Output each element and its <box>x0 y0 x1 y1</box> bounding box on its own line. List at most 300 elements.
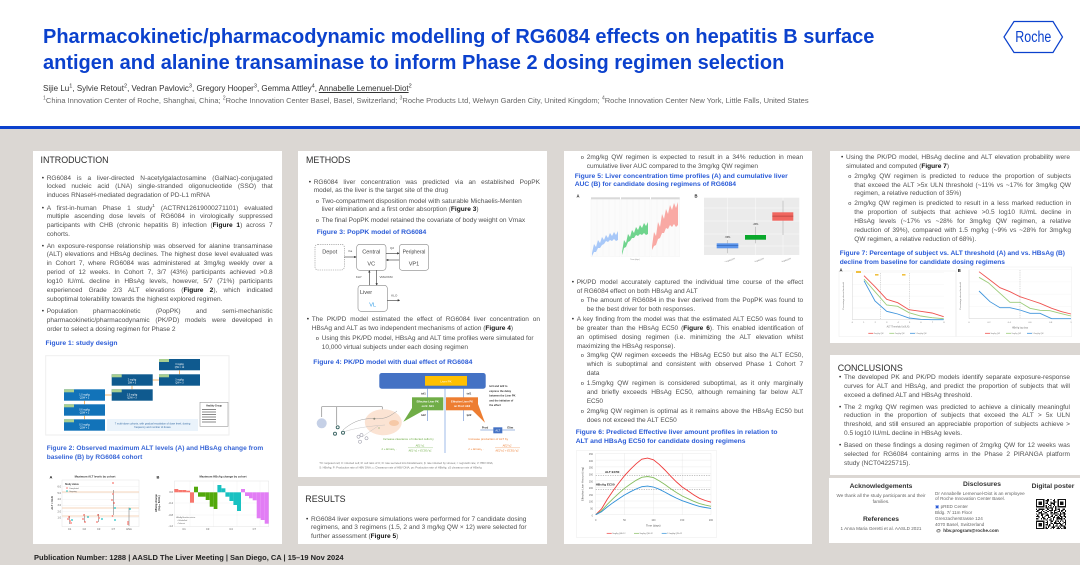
text: using PK/PD: Using the PK/PD model, HBsAg decline and ALT elevation probability were <box>846 154 1070 161</box>
footnote: TC: targeted cell; C: infected cell; R: cell ratio of C; D: rate secreted into bloodstream; β: rate infected by viruses; r: regrowth rate; V: HBV DNA; <box>319 461 493 465</box>
cohort boxes: 3 mg/kg <box>175 363 184 366</box>
text: exposure-response: suboptimal tolerability towards the highest explored regimen. <box>47 296 222 303</box>
figure 6: effective liver amount line chart <box>576 450 717 538</box>
text: conclusion 3: Based on these findings a dosing regimen of 2mg/kg QW for 12 weeks was <box>844 442 1070 449</box>
figure 6: effective liver amount line chart: 50 <box>623 519 626 522</box>
figure 6: effective liver amount line chart: Effective Liver Amount (mg) <box>580 467 584 501</box>
text: best driver <box>587 297 803 315</box>
note: and the initiation of <box>489 398 513 402</box>
heading: introduction: INTRODUCTION <box>40 155 109 165</box>
disclosures: of Roche Innovation Center Basel. <box>935 496 1005 501</box>
figure 5B: cumulative AUC box plot: -50% <box>725 236 731 239</box>
text: two-compartment model: Two-compartment disposition model with saturable Michaelis-Menten <box>322 198 522 204</box>
figure 2A: maximum ALT levels chart: 2.0 <box>58 510 62 514</box>
panel: results simulations <box>830 151 1080 343</box>
figure 7B: percentage vs HBsAg decline: 0.2 <box>987 322 991 324</box>
figure 7 title <box>840 250 1065 266</box>
figure 7A: percentage vs ALT threshold: 4 <box>897 322 899 324</box>
figure 3: PopPK compartment diagram: Ka <box>348 249 352 253</box>
figure 4: PK/PD dual-effect diagram: AE2^γ2 <box>502 444 512 448</box>
text: conclusion 2: The 2 mg/kg QW regimen was predicted to achieve a clinically meaningful <box>844 404 1070 410</box>
text: exposure-response: log10 IU/mL decline in HBsAg levels, however, 5/7 (71%) participants <box>47 278 273 285</box>
legend: 2mg/kg QW×12 <box>640 532 653 535</box>
note: tel1 and tel2 to <box>489 384 508 388</box>
legend <box>607 532 682 535</box>
cohort boxes: 0.6 mg/kg <box>79 408 90 411</box>
panel: acknowledgements, disclosures, digital poster <box>829 478 1080 543</box>
figure 2A: maximum ALT levels chart: C1 <box>68 527 72 531</box>
affiliations: 1China Innovation Center of Roche, Shanghai, China; 2Roche Innovation Center Basel, Basel, Switzerland; 3Roche Products Ltd, Welwyn Garden City, United Kingdom; 4Roche Innovation Center New York, Little Falls, United States <box>43 95 809 104</box>
figure 7B: percentage vs HBsAg decline: 0.8 <box>1049 322 1053 324</box>
text: PK/PD estimated effect: HBsAg and ALT as two independent mechanisms of action (Figure 4) <box>312 325 513 332</box>
text: exposure simulations: regimens, and 3 regimens (1.5, 2 and 3 mg/kg QW × 12) were selected for <box>311 524 527 531</box>
figure 2A: maximum ALT levels chart: 4.0 <box>58 498 62 501</box>
figure 7A: percentage vs ALT threshold: 8 <box>943 322 945 324</box>
legend box: Healthy Group <box>206 404 223 408</box>
text: models developed: Population pharmacokinetic (PopPK) and semi-mechanistic <box>47 308 273 315</box>
disclosures: 4070 Basel, Switzerland <box>935 522 984 527</box>
text: exposure-response: in Cohort 7, where RG6084 was administered at 3mg/kg weekly over a <box>47 260 273 267</box>
formulas: AE1^γ1 + EC50₁^γ1 <box>407 448 432 452</box>
figure 7 title: decline from baseline for candidate dosing regimens <box>840 259 1005 266</box>
cohort boxes: QW × 12 <box>175 366 185 369</box>
text: final PopPK: The final PopPK model retained the covariate of body weight on Vmax <box>322 217 525 224</box>
figure 6: effective liver amount line chart: 350 <box>589 467 594 470</box>
text: simulation: 10,000 virtual subjects under each dosing regimen <box>322 344 468 350</box>
text: first-in-human study: A first-in-human Phase 1 study1 (ACTRN12619000271101) evaluated <box>47 202 273 212</box>
note: 7 multi-dose cohorts, with gradual escalation of dose level, dosing <box>115 422 191 426</box>
text: RG6084 liver concentration: RG6084 liver concentration was predicted via an established PopPK <box>314 178 540 186</box>
footnote <box>319 461 493 469</box>
figure 7A: percentage vs ALT threshold: 5 <box>909 322 911 324</box>
figure 6: effective liver amount line chart: 100 <box>651 519 656 522</box>
figure 5 title <box>575 173 788 188</box>
text: conclusion 2 <box>844 404 1070 439</box>
references: 1 Anna Maria Geretti et al. AASLD 2021 <box>841 526 921 531</box>
text: exposure-response: experienced Grade 2/3 ALT elevations (Figure 2), which indicated <box>47 287 273 294</box>
text: 2 mg/kg optimal: 2mg/kg QW regimen is optimal as it remains above the HBsAg EC50 but <box>587 408 803 415</box>
references: References <box>863 516 899 523</box>
text: PK/PD captured <box>577 279 803 296</box>
figure 7A: percentage vs ALT threshold: 6 <box>920 322 922 324</box>
figure 7 title: Figure 7: Percentage of subject vs. ALT threshold (A) and vs. HBsAg (B) <box>840 250 1065 257</box>
figure 6 title: Figure 6: Predicted Effective liver amount profiles in relation to <box>576 429 777 436</box>
text: conclusion 1: curves for ALT and HBsAg, and predict the proportion of subjects that will <box>844 383 1070 390</box>
effect boxes: Effective Liver PK <box>417 400 439 404</box>
cohort boxes: QW × 3 <box>128 381 137 384</box>
text: ALT threshold reduction <box>854 173 1071 199</box>
text: exposure-response: period of 12 weeks. In Cohort 7, 3/7 (43%) participants achieved >0.8 <box>47 269 273 276</box>
formulas: Increase clearance of infected cells by <box>383 437 434 441</box>
text: 2 mg/kg AUC: cumulative liver AUC compared to the 3mg/kg QW regimen <box>587 163 758 170</box>
figure 3: PopPK compartment diagram: Liver <box>360 290 372 296</box>
figure 5A: liver concentration profiles: A <box>576 194 580 198</box>
panel: conclusions <box>830 355 1080 475</box>
text: HBsAg decline reduction: 2mg/kg QW regimen is predicted to result in a less marked reduction in <box>854 200 1071 207</box>
figure 2B: maximum HBsAg change chart <box>155 474 269 531</box>
text: exposure simulations <box>311 516 539 542</box>
figure 4: PK/PD dual-effect diagram: tel2 <box>421 413 426 417</box>
text: exposure-response: (ALT) elevations and HBsAg declines. The highest dose level evaluated was <box>47 251 273 258</box>
text: ALT threshold reduction: that exceed the ALT >5x ULN threshold (~11% vs ~17% for 3mg/kg QW <box>854 182 1071 188</box>
acknowledgements: Acknowledgements <box>850 483 912 490</box>
panel: results continued <box>564 151 812 544</box>
text: conclusion 1: The developed PK and PK/PD models identify separate exposure-response <box>844 374 1070 381</box>
figure 6: effective liver amount line chart: ALT EC50 <box>605 470 620 474</box>
figure 2A: maximum ALT levels chart: HNA <box>126 527 132 531</box>
note: express the delay <box>489 389 512 393</box>
text: RG6084 liver concentration <box>314 178 540 196</box>
disclosures: Grenzacherstrasse 124 <box>935 516 983 521</box>
figure 6: effective liver amount line chart: 0 <box>592 514 594 517</box>
text: HBsAg decline reduction: the proportion of subjects that achieve >0.5 log10 IU/mL decline in <box>854 209 1071 216</box>
figure 6: effective liver amount line chart: 50 <box>590 508 594 511</box>
figure 6: effective liver amount line chart: 150 <box>589 494 594 497</box>
figure 7A: percentage vs ALT threshold: 2mg/kg QW <box>895 333 905 335</box>
figure 2B: maximum HBsAg change chart: Maximum HBsAg change by cohort <box>199 474 247 478</box>
figure 4: PK/PD dual-effect diagram <box>316 373 520 469</box>
text: two-compartment model <box>322 198 540 215</box>
text: using PK/PD: simulated and computed (Figure 7) <box>846 163 949 170</box>
figure 2B: maximum HBsAg change chart: C3 <box>206 527 210 531</box>
authors: Sijie Lu1, Sylvie Retout2, Vedran Pavlovic3, Gregory Hooper3, Gemma Attley4, Annabelle Lemenuel-Diot2 <box>43 83 412 92</box>
figure 2B: maximum HBsAg change chart: C1 <box>182 527 186 531</box>
figure 2A: maximum ALT levels chart: 3.0 <box>58 504 62 507</box>
disclosures <box>935 481 1025 533</box>
figure 6: effective liver amount line chart: 150 <box>680 519 685 522</box>
figure 4: PK/PD dual-effect diagram: 1 + Emax₂ · <box>468 447 484 451</box>
cohort boxes: QW × 3 <box>175 381 184 384</box>
formulas: 1 + Emax₁ · <box>381 447 397 451</box>
figure 2B: maximum HBsAg change chart: • Tolerant <box>177 522 185 525</box>
liver PK box <box>379 373 486 389</box>
text: HBsAg decline reduction: reduction of 39%), compared with 1.5 mg/kg (~9% vs ~28% for 3mg/kg <box>854 227 1071 234</box>
text: 2 mg/kg optimal <box>587 408 803 426</box>
figure 3: PopPK compartment diagram: KLP <box>356 275 362 279</box>
text: RG6084 description: RG6084 is a liver-directed N-acetylgalactosamine (GalNac)-conjugated <box>47 174 273 182</box>
figure 6: effective liver amount line chart: 100 <box>589 501 594 504</box>
figure 3: PopPK compartment diagram: VP1 <box>409 262 419 268</box>
figure 7A: percentage vs ALT threshold: 0 <box>852 322 854 324</box>
figure 6: effective liver amount line chart: 400 <box>589 460 594 463</box>
text: using PK/PD <box>846 154 1070 172</box>
text: 1.5 mg/kg: EC50 <box>587 398 603 405</box>
figure 2A: maximum ALT levels chart: A <box>50 474 53 480</box>
figure 5 title: AUC (B) for candidate dosing regimens of RG6084 <box>575 181 736 188</box>
QR code <box>1036 499 1066 529</box>
figure 6: effective liver amount line chart: 450 <box>589 453 594 456</box>
text: 3 mg/kg: data <box>587 370 599 377</box>
figure 6: effective liver amount line chart: 250 <box>589 480 594 483</box>
figure 2A: maximum ALT levels chart: C3 <box>97 527 101 531</box>
figure 5 title: Figure 5: Liver concentration time profiles (A) and cumulative liver <box>575 173 788 180</box>
figure 6: effective liver amount line chart: Time (days) <box>646 524 661 528</box>
liver PK box: Liver PK <box>440 380 452 384</box>
text: PK/PD estimated effect <box>312 316 540 334</box>
figure 2A: maximum ALT levels chart: C2 <box>83 527 87 531</box>
figure 2B: maximum HBsAg change chart: C7 <box>253 527 257 531</box>
panel: results start <box>298 486 547 544</box>
figure 7B: percentage vs HBsAg decline <box>956 266 1072 337</box>
legend: Completed <box>69 487 79 490</box>
ALT prod/elim: Prod <box>482 426 488 430</box>
cohort boxes <box>64 359 200 431</box>
formulas: AE1^γ1 <box>415 444 425 448</box>
text: conclusion 2: reduction in the proportion of subjects that exceed the ALT > 5x ULN <box>844 412 1070 419</box>
text: 3 mg/kg <box>587 352 803 379</box>
text: 2 mg/kg AUC <box>587 154 803 172</box>
figure 3 title: Figure 3: PopPK model of RG6084 <box>317 229 426 236</box>
figure 2A: maximum ALT levels chart: ALT × ULN <box>50 496 54 510</box>
figure 7B: percentage vs HBsAg decline: Percentage above threshold <box>959 282 962 310</box>
disclosures: Dr Annabelle Lemenuel-Diot is an employee <box>935 490 1025 496</box>
figure 6: effective liver amount line chart: 200 <box>709 519 714 522</box>
figure 3: PopPK compartment diagram: Depot <box>322 249 338 255</box>
figure 2A: maximum ALT levels chart: 6.0 <box>58 486 62 488</box>
figure 2B: maximum HBsAg change chart: -0.4 <box>169 501 174 505</box>
figure 2 title: baseline (B) by RG6084 cohort <box>47 454 142 461</box>
figure 3: PopPK compartment diagram: Q2 <box>390 246 394 250</box>
disclosures: ▣ pRED Center <box>935 504 968 509</box>
cohort boxes: Q2W × 2 <box>80 411 90 414</box>
figure 4: PK/PD dual-effect diagram: Increase production of ALT by <box>469 437 509 441</box>
text: exposure simulations: further assessment (Figure 5) <box>311 533 398 540</box>
text: 1.5 mg/kg: and briefly exceeds HBsAg EC50, although remaining far below ALT <box>587 389 803 396</box>
note: between the Liver PK <box>489 394 516 398</box>
effect boxes: on Prod: AE2 <box>454 404 471 408</box>
text: RG6084 liver concentration: model, as the liver is the target site of the drug <box>314 187 448 194</box>
text: key finding <box>577 316 803 352</box>
figure 4: PK/PD dual-effect diagram: tel1 <box>467 392 472 396</box>
figure 2B: maximum HBsAg change chart: B <box>157 474 160 480</box>
figure 6: effective liver amount line chart: 200 <box>589 487 594 490</box>
figure 7B: percentage vs HBsAg decline: 2mg/kg QW <box>1012 333 1021 335</box>
heading: conclusions: CONCLUSIONS <box>838 363 903 373</box>
figure 7A: percentage vs ALT threshold: 1 <box>863 322 865 324</box>
ALT prod/elim: Elim <box>507 426 514 430</box>
ALT prod/elim <box>480 426 515 433</box>
figure 7B: percentage vs HBsAg decline: 1.5mg/kg QW <box>1032 333 1044 335</box>
cohort boxes: 2 mg/kg <box>128 378 137 381</box>
cohort boxes: Q2W × 2 <box>80 426 90 429</box>
legend: Study status <box>65 483 80 486</box>
text: exposure-response: An exposure-response relationship was observed for alanine transaminase <box>47 242 273 250</box>
legend: Ongoing <box>69 491 77 493</box>
figure 3: PopPK compartment diagram: VC <box>367 262 375 268</box>
text: models developed: pharmacokinetic/pharmacodynamic (PK/PD) models were developed in <box>47 317 273 324</box>
text: first-in-human study: multiple ascending dose levels of RG6084 in virologically suppressed <box>47 213 273 220</box>
figure 6: effective liver amount line chart: HBsAg EC50 <box>596 482 615 486</box>
heading: methods: METHODS <box>306 155 350 165</box>
figure 2A: maximum ALT levels chart: C7 <box>112 527 116 531</box>
figure 7A: percentage vs ALT threshold: ALT Threshold (xULN) <box>887 326 910 328</box>
figure 7A: percentage vs ALT threshold: A <box>839 268 843 272</box>
text: exposure-response <box>47 242 273 305</box>
figure 4: PK/PD dual-effect diagram: AE2^γ2 + EC50₂^γ2 <box>494 448 519 452</box>
figure 2B: maximum HBsAg change chart: C4 <box>229 527 233 531</box>
title <box>43 26 874 74</box>
acknowledgements <box>836 483 926 504</box>
text: RG6084 description: locked nucleic acid (LNA) single-stranded oligonucleotide (SSO) that <box>47 183 273 190</box>
text: exposure simulations: RG6084 liver exposure simulations were performed for 7 candidate dosing <box>311 516 526 522</box>
panel: introduction <box>33 151 282 544</box>
text: conclusion 2: 0.5 log10 IU/mL decline in HBsAg levels. <box>844 430 962 437</box>
figure 2A: maximum ALT levels chart: 1.0 <box>58 516 62 520</box>
figure 2B: maximum HBsAg change chart: HBsAg Baseline status <box>176 516 195 519</box>
icon: Roche logo <box>1003 20 1064 54</box>
text: ALT threshold reduction: 2mg/kg QW regimen is predicted to reduce the proportion of subjects <box>854 173 1071 180</box>
digital poster heading: Digital poster <box>1032 483 1074 490</box>
text: first-in-human study: participants with CHB (chronic hepatitis B) infection (Figure 1) across 7 <box>47 222 273 229</box>
cohort boxes: Q2W × 3 <box>127 396 137 399</box>
figure 2A: maximum ALT levels chart: 5.0 <box>58 492 62 495</box>
text: 3 mg/kg: which is suboptimal and consistent with observed Phase 1 Cohort 7 <box>587 361 803 368</box>
acknowledgements: We thank all the study participants and their <box>836 493 926 498</box>
figure 7A: percentage vs ALT threshold: Percentage above threshold <box>842 282 845 310</box>
legend: 3mg/kg QW×12 <box>612 532 625 535</box>
note <box>107 419 198 431</box>
text: conclusion 1: exceed a defined ALT and HBsAg threshold. <box>844 392 972 399</box>
viral lifecycle <box>317 407 402 443</box>
figure 2 title: Figure 2: Observed maximum ALT levels (A) and HBsAg change from <box>47 445 263 452</box>
formulas <box>381 437 434 452</box>
figure 1: study design diagram <box>45 355 230 436</box>
figure 2B: maximum HBsAg change chart: HBsAg change <box>155 494 158 512</box>
text: 3 mg/kg: 3mg/kg QW regimen exceeds the HBsAg EC50 but also the ALT EC50, <box>587 352 803 359</box>
text: RG6084 description: induces RNaseH-mediated degradation of PD-L1 mRNA <box>47 192 210 199</box>
text: conclusion 1 <box>844 374 1070 401</box>
note: frequency and number of doses <box>134 425 171 429</box>
figure 5B: cumulative AUC box plot <box>694 194 800 262</box>
disclosures: Disclosures <box>963 481 1001 488</box>
text: 2 mg/kg optimal: does not exceed the ALT EC50 <box>587 417 677 424</box>
text: PK/PD estimated effect: The PK/PD model estimated the effect of RG6084 liver concentration on <box>312 316 540 323</box>
figure 2A: maximum ALT levels chart <box>50 474 140 531</box>
text: best driver: be the best driver for both responses. <box>587 306 695 313</box>
text: HBsAg decline reduction: QW regimen, a relative reduction of 68%). <box>854 236 976 243</box>
figure 2B: maximum HBsAg change chart: 0.0 <box>169 490 174 494</box>
figure 3: PopPK compartment diagram: VMAXKM <box>379 275 393 279</box>
note <box>489 384 516 407</box>
figure 5A: liver concentration profiles <box>576 194 680 261</box>
figure 7A: percentage vs ALT threshold <box>838 268 956 337</box>
text: 2 mg/kg AUC: 2mg/kg QW regimen is expected to result in a 34% reduction in mean <box>587 154 803 161</box>
title: antigen and alanine transaminase to inform Phase 2 dosing regimen selection <box>43 52 784 74</box>
figure 7A: percentage vs ALT threshold: 3mg/kg QW <box>874 333 884 335</box>
text: PK/PD captured: PK/PD model accurately captured the individual time course of the effect <box>577 279 803 286</box>
figure 7B: percentage vs HBsAg decline: 1 <box>1070 322 1072 324</box>
text: PK/PD captured: of RG6084 effect on both HBsAg and ALT <box>577 288 698 294</box>
effect boxes <box>403 397 485 423</box>
figure 2B: maximum HBsAg change chart: (log₁₀ IU/mL) <box>158 495 161 511</box>
text: 1.5 mg/kg: 1.5mg/kg QW regimen is considered suboptimal, as it only marginally <box>587 380 803 387</box>
text: simulation: Using this PK/PD model, HBsAg and ALT time profiles were simulated for <box>322 335 534 342</box>
figure 7B: percentage vs HBsAg decline: HBsAg log drop <box>1012 326 1029 330</box>
acknowledgements: families. <box>873 499 889 504</box>
figure 4 title: Figure 4: PK/PD model with dual effect of RG6084 <box>313 359 472 366</box>
figure 2A: maximum ALT levels chart: Maximum ALT levels by cohort <box>75 474 116 478</box>
text: first-in-human study <box>47 204 273 240</box>
figure 3: PopPK compartment diagram: Peripheral <box>403 249 425 255</box>
figure 7A: percentage vs ALT threshold: 1.5mg/kg QW <box>916 333 927 335</box>
figure 6: effective liver amount line chart: 300 <box>589 474 594 476</box>
effect boxes: on E: AE1 <box>422 404 434 408</box>
figure 2 title <box>47 445 263 461</box>
figure 7A: percentage vs ALT threshold: 7 <box>932 322 934 324</box>
text: conclusion 2: threshold, and still ensured an appreciable proportion of subjects achieve > <box>844 421 1070 428</box>
figure 1 title: Figure 1: study design <box>46 340 118 347</box>
figure 7B: percentage vs HBsAg decline: 0 <box>968 322 970 324</box>
text: HBsAg decline reduction <box>854 200 1071 245</box>
cohort boxes: 1.5 mg/kg <box>127 393 138 396</box>
figure 3: PopPK compartment diagram: VL <box>369 302 376 308</box>
note: the effect <box>489 403 501 407</box>
figure 4: PK/PD dual-effect diagram: tpl2 <box>467 413 472 417</box>
figure 5B: cumulative AUC box plot: -34% <box>753 223 759 226</box>
text: 1.5 mg/kg <box>587 380 803 407</box>
cohort boxes: Q2W × 2 <box>80 396 90 399</box>
text: conclusion 3: study (NCT04225715). <box>844 460 910 467</box>
figure 7A: percentage vs ALT threshold: 2 <box>875 322 877 324</box>
figure 5B: cumulative AUC box plot: B <box>694 194 698 198</box>
figure 5A: liver concentration profiles: Time (days) <box>630 259 640 261</box>
footer: publication number: Publication Number: 1288 | AASLD The Liver Meeting | San Diego, CA | 15–19 Nov 2024 <box>34 553 344 562</box>
disclosures: Bldg. 7/ 11m Floor <box>935 510 972 515</box>
text: first-in-human study: cohorts. <box>47 231 70 238</box>
title: Pharmacokinetic/pharmacodynamic modelling of RG6084 effects on hepatitis B surface <box>43 26 874 48</box>
text: key finding: be greater than the HBsAg EC50 (Figure 6). This enabled identification of <box>577 325 803 332</box>
text: simulation <box>322 335 540 352</box>
ALT prod/elim: ALT <box>495 428 501 432</box>
legend box <box>200 402 228 426</box>
data points <box>67 482 129 525</box>
text: RG6084 description <box>47 174 273 201</box>
icon: Roche logo: Roche <box>1015 29 1051 46</box>
figure 2B: maximum HBsAg change chart: -1.2 <box>169 524 174 528</box>
panel: methods <box>298 151 547 477</box>
text: models developed <box>47 308 273 335</box>
figure 7B: percentage vs HBsAg decline: 3mg/kg QW <box>990 333 1000 335</box>
effect boxes: Effective Liver PK <box>451 400 473 404</box>
figure 6: effective liver amount line chart: 0 <box>595 519 597 522</box>
figure 6 title: ALT and HBsAg EC50 for candidate dosing regimens <box>576 438 745 445</box>
footnote: S: HBsAg; P: Production rate of HBV DNA; c: Clearance rate of HBV DNA; ps: Production rate of HBsAg; cS clearance rate of HBsAg <box>319 465 482 469</box>
figure 7A: percentage vs ALT threshold: 3 <box>886 322 888 324</box>
figure 3: PopPK compartment diagram: KLO <box>391 294 398 298</box>
text: HBsAg decline reduction: HBsAg levels (~17% vs ~28% for 3mg/kg QW regimen, a relative <box>854 218 1071 225</box>
text: two-compartment model: liver elimination and a first order absorption (Figure 3) <box>322 206 479 213</box>
text: key finding: maximizing the HBsAg response). <box>577 343 675 350</box>
figure 6 title <box>576 429 778 445</box>
text: key finding: A key finding from the model was that the estimated ALT EC50 was found to <box>577 316 803 323</box>
figure 4: PK/PD dual-effect diagram: tel1 <box>421 392 426 396</box>
figure 2B: maximum HBsAg change chart: -0.8 <box>169 513 174 517</box>
header band <box>0 0 1080 126</box>
disclosures: @ hbv.program@roche.com <box>936 528 999 533</box>
figure 7B: percentage vs HBsAg decline: B <box>958 268 961 273</box>
text: ALT threshold reduction: regimen, a relative reduction of 35%) <box>854 190 961 197</box>
figure 7B: percentage vs HBsAg decline: 0.6 <box>1028 322 1032 324</box>
text: models developed: order to select a dosing regimen for Phase 2 <box>47 326 176 333</box>
cohort boxes: 3 mg/kg <box>175 378 184 381</box>
figure 3: PopPK compartment diagram <box>314 244 429 312</box>
cohort boxes: 1.0 mg/kg <box>79 393 90 396</box>
figure 7B: percentage vs HBsAg decline: 0.4 <box>1008 322 1012 324</box>
references <box>840 516 922 531</box>
figure 2B: maximum HBsAg change chart: • Unlabelled <box>177 520 187 522</box>
legend <box>65 483 80 493</box>
text: conclusion 3 <box>844 442 1070 469</box>
